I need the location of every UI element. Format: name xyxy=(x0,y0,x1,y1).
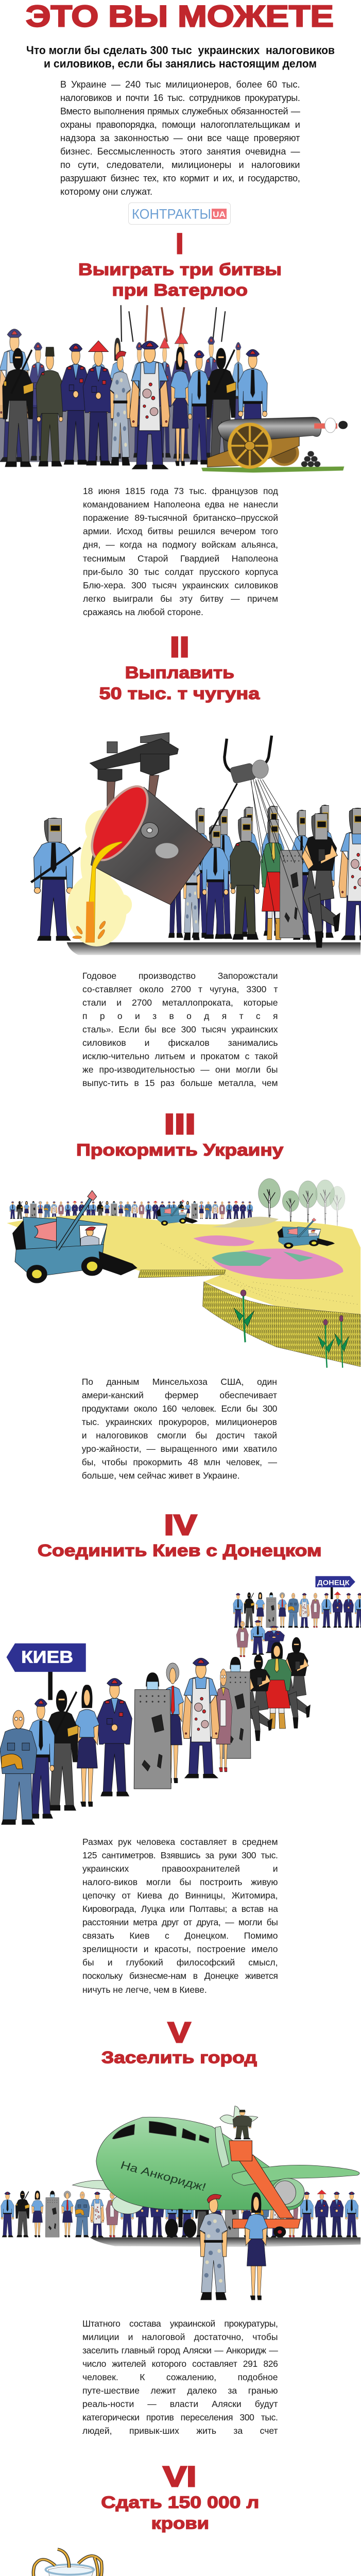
text block IV: связать Киев с Донецком. Помимо xyxy=(82,1930,278,1941)
front figures xyxy=(199,2193,268,2300)
numeral II: II xyxy=(170,631,190,663)
landing gear xyxy=(165,2209,196,2238)
intro text: которому они служат. xyxy=(60,187,152,197)
tubes xyxy=(13,2549,173,2576)
bottle xyxy=(20,2565,121,2576)
panel: section II xyxy=(30,631,361,1088)
text block IV: 125 сантиметров. Взявшись за руки 300 тыс. xyxy=(82,1850,278,1860)
text block IV: зрелищности и красоты, построение имело xyxy=(82,1944,278,1954)
boarding stairs xyxy=(229,2141,300,2237)
icon: ladle xyxy=(81,733,213,905)
intro text: по сути, следователи, милиционеры и налоговики xyxy=(60,160,300,170)
text block II: силовиков и фискалов занимались xyxy=(82,1038,278,1048)
intro text: налоговиков и почти 16 тыс. сотрудников прокуратуры. xyxy=(60,93,300,103)
subtitle: и силовиков, если бы занялись настоящим делом xyxy=(44,57,317,70)
numeral IV: IV xyxy=(164,1509,197,1541)
text block II: со-ставляет около 2700 т чугуна, 3300 т xyxy=(82,984,278,994)
plane xyxy=(73,2106,359,2214)
text block IV: бы и глубокий философский смысл, xyxy=(82,1957,278,1968)
illustration: human chain from Kyiv to Donetsk xyxy=(0,1576,361,1824)
intro text: надзора за законностью — они все чаще проверяют xyxy=(60,133,300,143)
illustration: welders pouring molten iron xyxy=(31,733,361,955)
sign post Donetsk xyxy=(315,1576,355,1599)
text block III: и налоговиков смогли бы достич такой xyxy=(82,1430,277,1440)
heading I: при Ватерлоо xyxy=(112,281,248,299)
text block I: сражаясь на любой стороне. xyxy=(83,607,203,617)
text block II: п р о и з в о д я т с я xyxy=(82,1011,278,1021)
sign post Kyiv xyxy=(7,1643,86,1700)
text block V: милиции и налоговой достаточно, чтобы xyxy=(82,2332,278,2342)
wheat field xyxy=(7,1215,360,1314)
heading I xyxy=(78,260,282,299)
heading II: 50 тыс. т чугуна xyxy=(99,684,260,703)
logo: Контракты UA: UA xyxy=(213,210,226,219)
intro text: В Украине — 240 тыс милиционеров, более 60 тыс. xyxy=(60,79,300,90)
text block II: исклю-чительно литьем и прокатом с такой xyxy=(82,1051,278,1061)
title: ЭТО ВЫ МОЖЕТЕ xyxy=(26,0,334,33)
text block V: Штатного состава украинской прокуратуры, xyxy=(82,2318,278,2329)
birch trees xyxy=(259,1179,345,1229)
heading IV: Соединить Киев с Донецком xyxy=(38,1541,322,1560)
front welders xyxy=(230,808,361,947)
illustration: crowd of officers with cannon xyxy=(0,305,348,472)
pulley and cables xyxy=(210,736,313,940)
officer on stairs xyxy=(233,2110,252,2139)
text block II: Годовое производство Запорожстали xyxy=(82,971,278,981)
far crowd xyxy=(10,1201,253,1219)
text block III: уро-жайности, — выращенного ими хватило xyxy=(82,1444,277,1454)
intro text: бизнес. Бессмысленность этого занятия очевидна — xyxy=(60,146,300,157)
text block V xyxy=(82,2318,278,2436)
combines xyxy=(13,1191,335,1283)
text block IV: украинских правоохранителей и xyxy=(82,1863,278,1874)
numeral I: I xyxy=(176,227,183,260)
heading II: Выплавить xyxy=(125,664,234,682)
text block III: амери-канский фермер обеспечивает xyxy=(82,1390,277,1400)
panel: section III xyxy=(7,1108,360,1481)
sign post Donetsk: ДОНЕЦК xyxy=(317,1579,350,1587)
back row of welders xyxy=(166,805,335,940)
text block IV: Размах рук человека составляет в среднем xyxy=(82,1837,278,1847)
logo: Контракты UA xyxy=(129,203,231,225)
text block I: легко выиграли бы эту битву — причем xyxy=(83,594,278,604)
text block V: реаль-ности — власти Аляски будут xyxy=(82,2399,278,2409)
far end of the chain xyxy=(233,1591,361,1628)
text block III: бы, чтобы прокормить 48 млн человек, — xyxy=(82,1457,277,1467)
text block III: больше, чем сейчас живет в Украине. xyxy=(82,1470,240,1481)
numeral III: III xyxy=(164,1108,196,1140)
heading VI: крови xyxy=(151,2514,209,2533)
intro text: Вместо выполнения прямых служебных обязанностей — xyxy=(60,106,300,116)
chain of officers xyxy=(0,1620,310,1824)
text block V: путе-шествие лежит далеко за гранью xyxy=(82,2385,278,2396)
text block II: выпус-тить в 15 раз больше металла, чем xyxy=(82,1078,278,1088)
heading III: Прокормить Украину xyxy=(76,1141,284,1159)
text block I: дня, — когда на подмогу войскам альянса, xyxy=(83,539,278,550)
panel: section I xyxy=(0,227,348,617)
text block I: армии. Исход битвы решился вечером того xyxy=(83,526,278,536)
text block V: заселить главный город Аляски — Анкоридж — xyxy=(82,2345,278,2355)
numeral V: V xyxy=(168,2016,191,2048)
heading VI xyxy=(101,2493,259,2533)
subtitle: Что могли бы сделать 300 тыс украинских налоговиков xyxy=(26,44,335,57)
heading II xyxy=(99,664,260,703)
text block I: 18 июня 1815 года 73 тыс. французов под xyxy=(83,486,278,496)
intro text xyxy=(60,79,300,197)
text block I xyxy=(83,486,278,617)
text block I: при-было 30 тыс солдат прусского корпуса xyxy=(83,567,278,577)
text block I: поражение 89-тысячной британско–прусской xyxy=(83,513,278,523)
illustration: giant bottle of blood xyxy=(7,2549,361,2576)
text block IV: ничуть не легче, чем в Киеве. xyxy=(82,1985,207,1995)
text block I: теснимым Старой Гвардией Наполеона xyxy=(83,553,278,564)
sign post Kyiv: КИЕВ xyxy=(21,1648,73,1667)
text block II: сталь». Если бы все 300 тысяч украинских xyxy=(82,1024,278,1035)
icon: cannon xyxy=(201,417,348,472)
text block V: число жителей которого составляет 291 826 xyxy=(82,2359,278,2369)
text block IV: расстоянии метра друг от друга, — могли бы xyxy=(82,1917,278,1927)
numeral VI: VI xyxy=(163,2460,196,2493)
panel: header xyxy=(26,0,335,225)
text block IV xyxy=(82,1837,278,1995)
panel: section VI xyxy=(32,2460,259,2576)
text block IV: налого-виков могли бы построить живую xyxy=(82,1877,278,1887)
text block V: человек. К сожалению, подобное xyxy=(82,2372,278,2382)
heading I: Выиграть три битвы xyxy=(78,260,282,279)
text block IV: цепочку от Киева до Винницы, Житомира, xyxy=(82,1890,278,1901)
text block III: продуктами около 160 человек. Если бы 300 xyxy=(82,1403,277,1414)
panel: section IV xyxy=(0,1509,361,1995)
text block III: тыс. украинских прокуроров, милиционеров xyxy=(82,1417,277,1427)
text block I: командованием Наполеона едва не нанесли xyxy=(83,499,278,510)
text block V: категорически против переселения 300 тыс. xyxy=(82,2412,278,2422)
text block I: Блю-хера. 300 тысяч украинских силовиков xyxy=(83,580,278,590)
illustration: plane to Anchorage xyxy=(1,2106,360,2300)
subtitle xyxy=(26,44,335,70)
text block II: стали и 2700 металлопроката, которые xyxy=(82,997,278,1008)
icon: glow of molten iron xyxy=(67,810,132,946)
logo: Контракты UA: КОНТРАКТЫ xyxy=(132,206,211,222)
text block II: же про-изводительностью — они могли бы xyxy=(82,1064,278,1075)
intro text: охраны правопорядка, помощи налогоплательщикам и xyxy=(60,120,300,130)
heading V: Заселить город xyxy=(101,2048,257,2067)
illustration: combines on a wheat field xyxy=(7,1179,360,1368)
heading VI: Сдать 150 000 л xyxy=(101,2493,259,2512)
text block III xyxy=(81,1377,277,1481)
text block III: По данным Минсельхоза США, один xyxy=(82,1377,277,1387)
panel: section V xyxy=(1,2016,360,2436)
thistles xyxy=(234,1290,349,1368)
text block IV: поскольку бизнесме-нам в Донецке живется xyxy=(82,1971,278,1981)
crowd row xyxy=(1,2190,358,2238)
text block IV: Кировограда, Луцка или Полтавы; а встав на xyxy=(82,1904,278,1914)
text block V: людей, привык-ших жить за счет xyxy=(82,2426,278,2436)
intro text: разрушают бизнес тех, кто кормит и их, и государство, xyxy=(60,173,300,183)
text block II xyxy=(82,971,278,1088)
cop with rifle xyxy=(31,818,80,940)
plane: На Анкоридж! xyxy=(119,2159,208,2193)
